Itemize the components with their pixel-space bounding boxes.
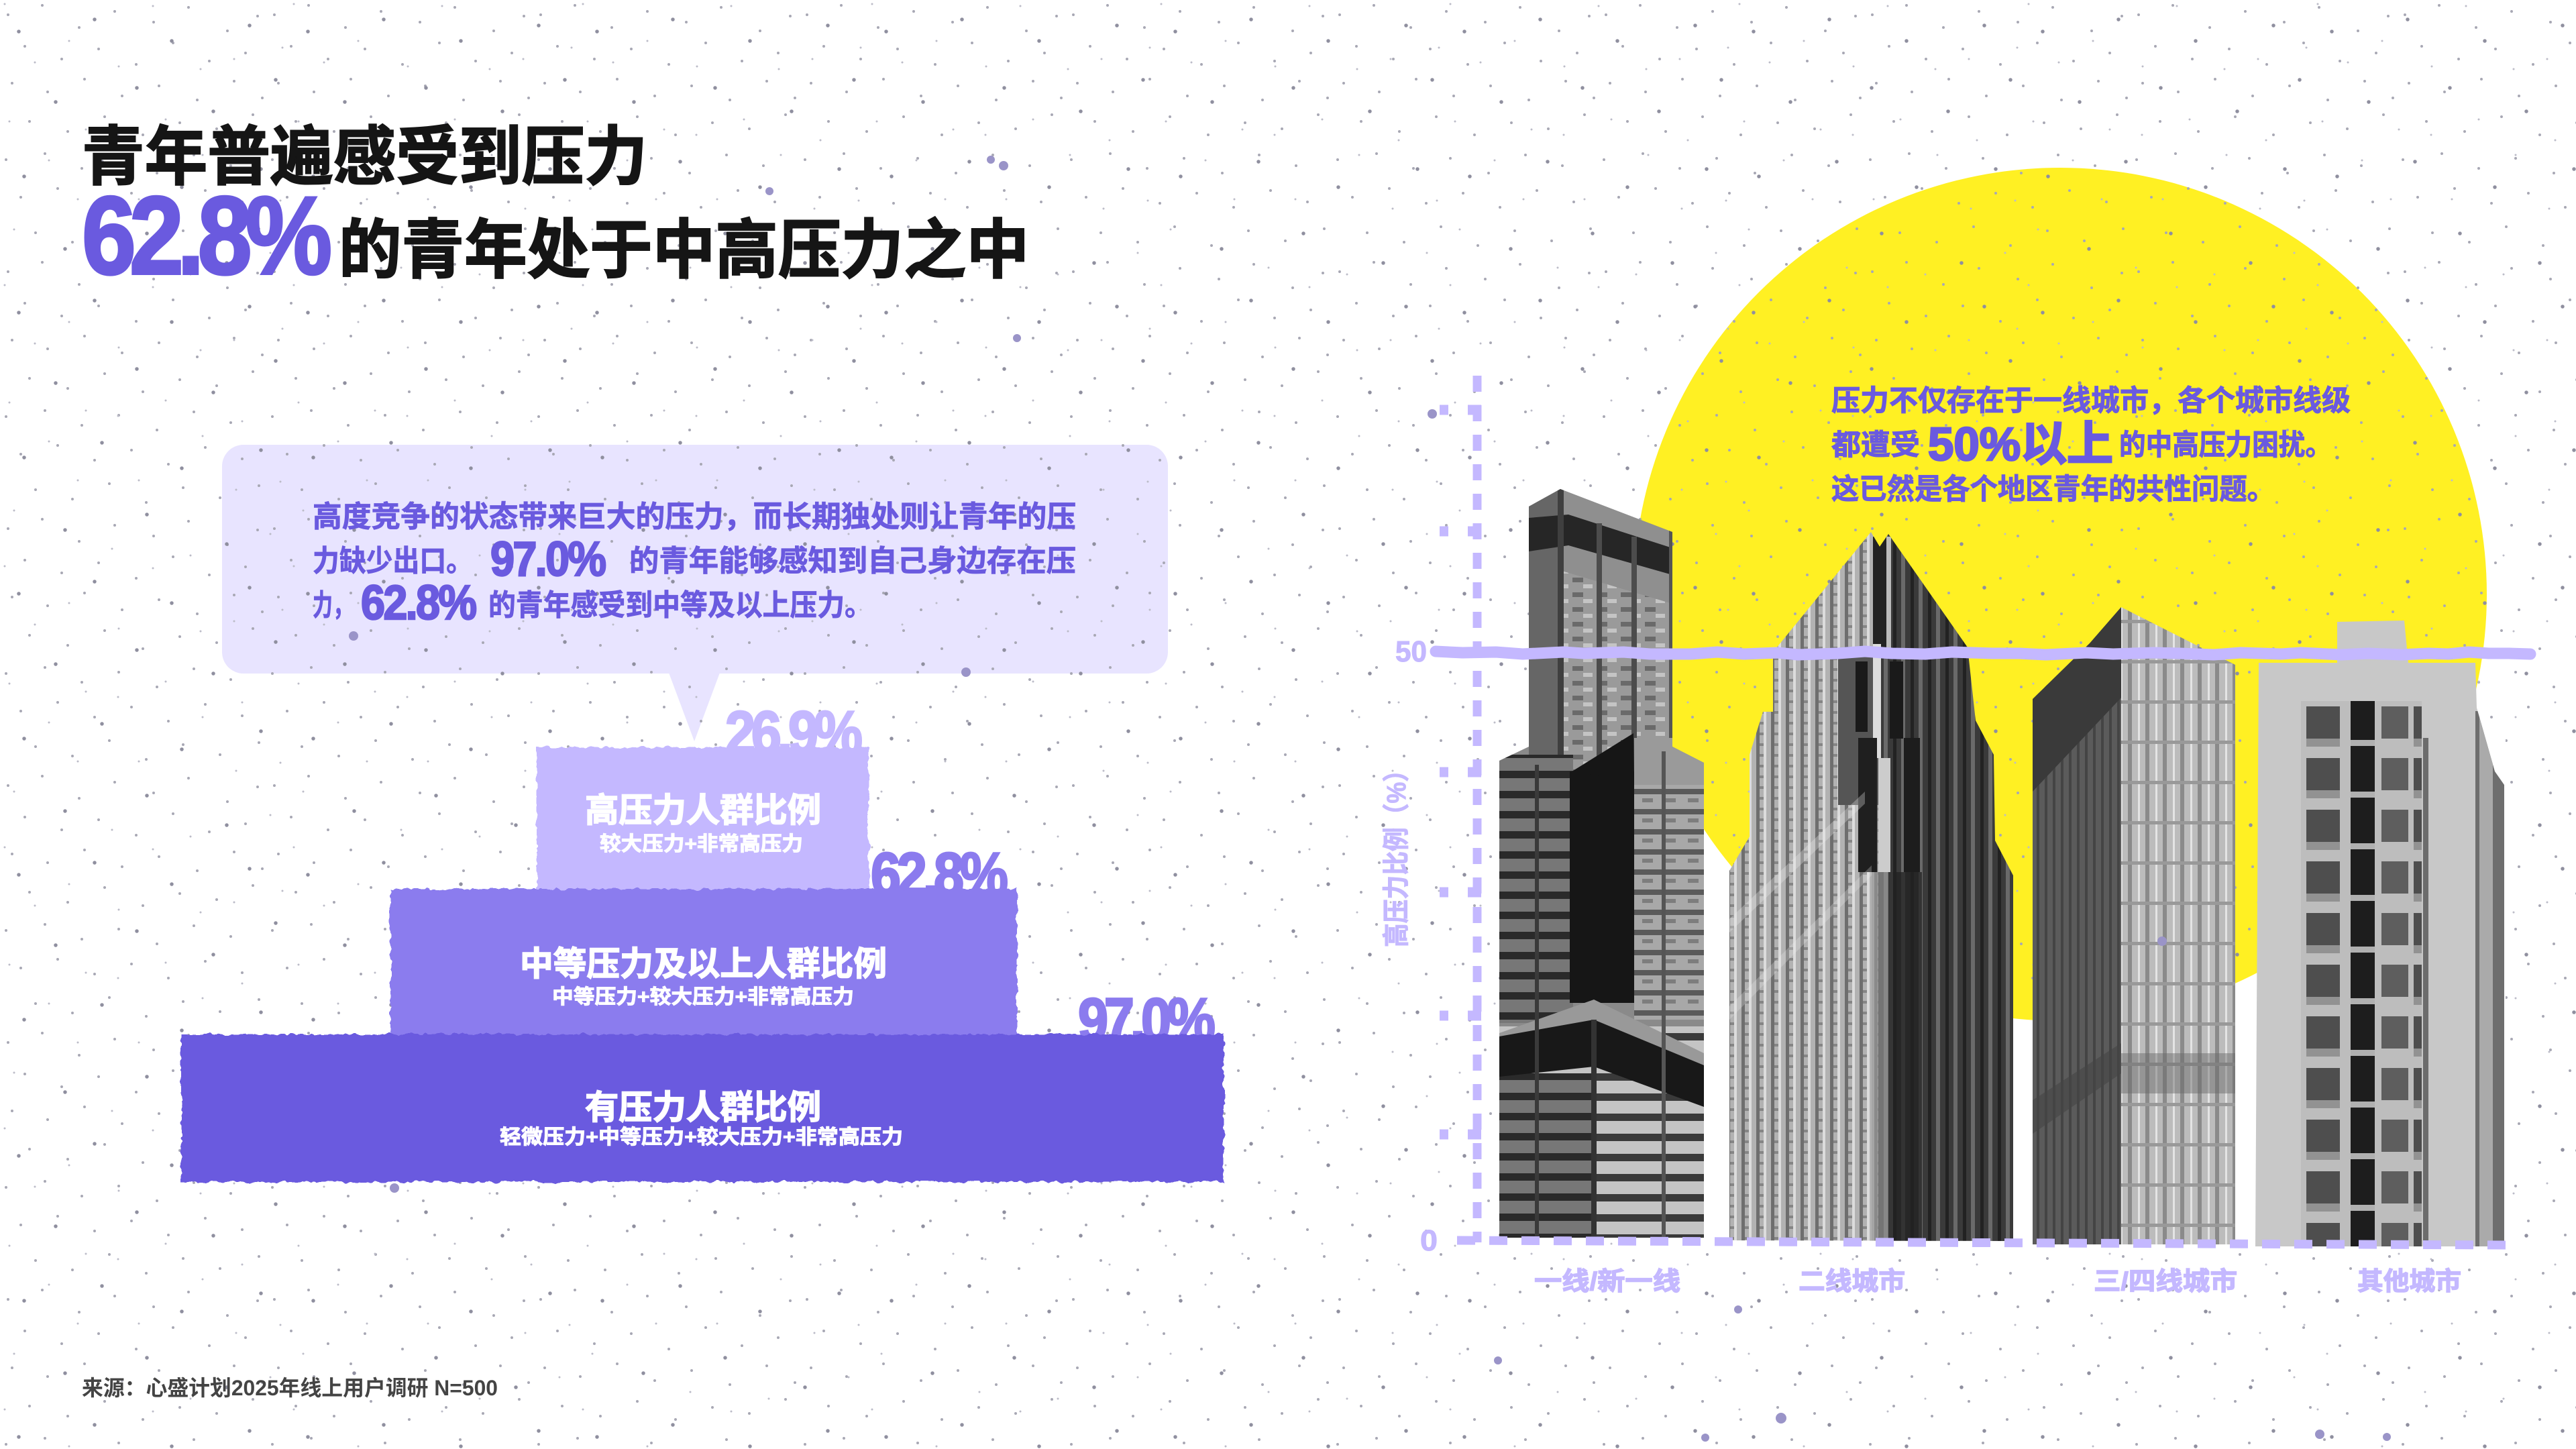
chart: pressure by city tier [1382,376,2530,1296]
building: tier 3 tower [2029,604,2237,1248]
title: 青年普遍感受到压力 [82,121,647,193]
pyramid chart [181,699,1224,1182]
y axis [1440,376,1481,1242]
pyramid tier: any pressure: 有压力人群比例 [585,1089,821,1126]
text block: yellow circle copy [1831,385,2351,506]
title [82,121,1029,297]
pyramid tier: high pressure [537,747,869,892]
source note: 来源：心盛计划2025年线上用户调研 N=500 [82,1376,498,1400]
x axis labels: 三/四线城市 [2094,1268,2237,1296]
building: other cities apartment [2254,617,2509,1251]
y axis value: 50: 50 [1395,635,1427,668]
text block: speech bubble copy: 的青年能够感知到自己身边存在压 [629,545,1076,578]
text block: speech bubble copy: 力缺少出口。 [313,545,473,578]
text block: speech bubble copy: 力， [313,589,353,622]
pyramid tier: medium and above: 中等压力+较大压力+非常高压力 [552,986,854,1008]
value label: 62.8%: 62.8% [871,841,1008,909]
text block: speech bubble copy: 的青年感受到中等及以上压力。 [488,589,872,622]
text block: speech bubble copy: 97.0% [490,532,606,586]
value label: 97.0%: 97.0% [1078,986,1216,1055]
x axis labels: 一线/新一线 [1534,1268,1680,1296]
text block: yellow circle copy: 这已然是各个地区青年的共性问题。 [1831,474,2275,506]
text block: speech bubble copy: 62.8% [361,576,477,630]
text block: yellow circle copy: 的中高压力困扰。 [2119,429,2332,462]
title: 的青年处于中高压力之中 [339,215,1029,286]
building: tier 2 tower [1724,530,2016,1244]
panel: speech bubble with summary [222,445,1168,741]
text block: speech bubble copy: 高度竞争的状态带来巨大的压力，而长期独处则让青年的压 [313,500,1076,533]
pyramid tier: medium and above [390,889,1017,1037]
50 reference line [1436,651,2530,655]
pyramid tier: any pressure: 轻微压力+中等压力+较大压力+非常高压力 [500,1126,903,1148]
building: tier 1 tower [1496,483,1711,1241]
x axis labels [1534,1268,2461,1296]
x axis labels: 其他城市 [2357,1268,2461,1296]
pyramid tier: any pressure [181,1034,1224,1182]
title: 62.8% [82,173,332,297]
x axis [1457,1240,2506,1245]
x axis labels: 二线城市 [1799,1268,1905,1296]
pyramid tier: high pressure: 较大压力+非常高压力 [600,833,803,855]
value label: 26.9%: 26.9% [725,699,863,767]
pyramid tier: medium and above: 中等压力及以上人群比例 [520,945,887,983]
text block: yellow circle copy: 压力不仅存在于一线城市，各个城市线级 [1831,385,2351,417]
y axis title: 高压力比例（%） [1382,758,1411,947]
text block: yellow circle copy: 都遭受 [1831,429,1920,462]
text block: speech bubble copy [313,500,1076,630]
yellow circle [1633,168,2487,1021]
pyramid tier: high pressure: 高压力人群比例 [585,792,821,829]
y axis value: 0: 0 [1420,1224,1438,1257]
text block: yellow circle copy: 50%以上 [1928,418,2113,470]
